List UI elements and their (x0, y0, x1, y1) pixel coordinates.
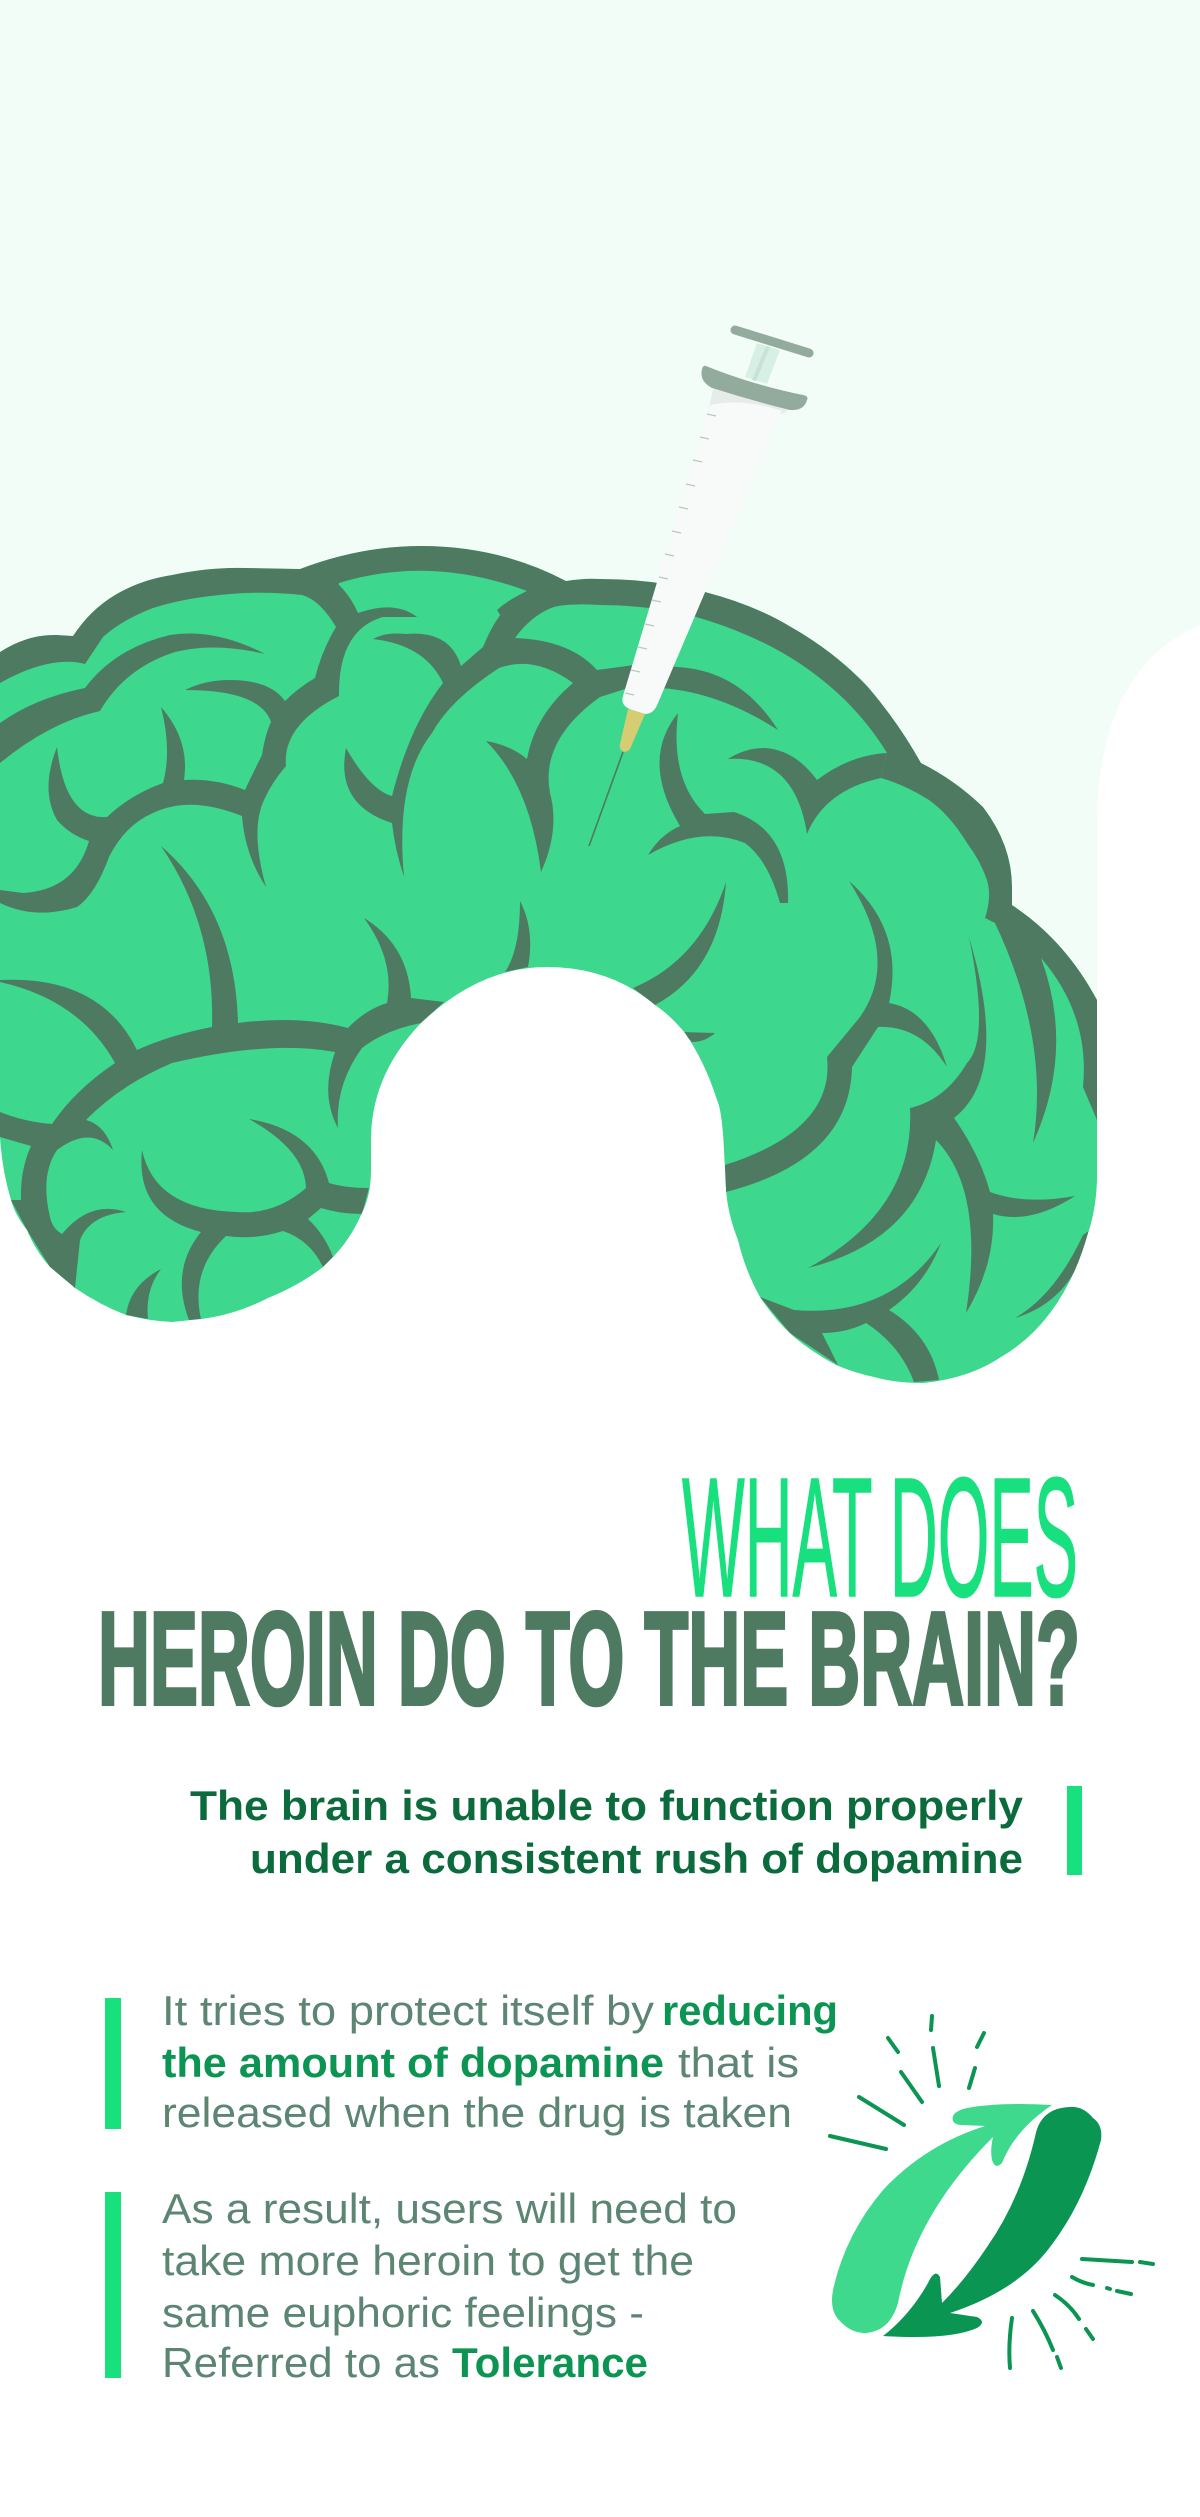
plunger rod stripe (752, 346, 770, 381)
brain body (0, 546, 1097, 1383)
statement line 1: The brain is unable to function properly (190, 1782, 1024, 1829)
statement accent bar (1067, 1786, 1082, 1875)
dark arrow (883, 2107, 1101, 2337)
accent bar (105, 1998, 121, 2129)
line 2 regular: that is (678, 2039, 799, 2086)
paragraph: tolerance (105, 2185, 737, 2386)
title (98, 1443, 1080, 1732)
outer contour band (0, 546, 1097, 1143)
tick marks (625, 414, 716, 695)
plunger rod (745, 343, 780, 384)
line 2: take more heroin to get the (162, 2237, 694, 2284)
fold: upper left arc (0, 634, 265, 763)
light arrow (832, 2104, 1052, 2333)
syringe (589, 330, 809, 846)
icon: cycle arrows (830, 2016, 1153, 2368)
paragraph: protect (105, 1987, 838, 2136)
needle hub (620, 709, 645, 752)
fold: right lobe network (725, 881, 947, 1192)
fold: right notch (728, 748, 887, 834)
line 4 bold: Tolerance (452, 2339, 648, 2386)
fold: lower left network (0, 846, 444, 1288)
fold: lower right sliver (1015, 1230, 1090, 1318)
line 1 regular: It tries to protect itself by (162, 1987, 654, 2034)
brain folds (0, 546, 1097, 1382)
flange (701, 366, 808, 410)
accent bar (105, 2192, 121, 2378)
needle (589, 752, 623, 846)
fold: lower left lobe (141, 1119, 369, 1320)
barrel (622, 403, 782, 714)
fold: centre right hook (648, 713, 788, 903)
fold: above arch right (633, 882, 726, 1005)
line 3: same euphoric feelings - (162, 2289, 644, 2336)
fold: centre network (344, 591, 778, 877)
statement line 2: under a consistent rush of dopamine (250, 1835, 1023, 1882)
burst rays (830, 2016, 1153, 2368)
fold: above arch left (505, 901, 530, 972)
fold: bottom right network (760, 1243, 941, 1382)
fold: bottom left small (126, 1269, 161, 1319)
line 4 regular: Referred to as (162, 2339, 440, 2386)
fold: upper left network (0, 583, 417, 913)
line 3: released when the drug is taken (162, 2089, 792, 2136)
brain illustration (0, 546, 1097, 1383)
plunger cap (735, 330, 809, 353)
fold: far right network (808, 937, 1075, 1313)
line 1: As a result, users will need to (162, 2185, 737, 2232)
intro statement (190, 1782, 1082, 1882)
graduation ticks (625, 414, 716, 695)
barrel neck (708, 389, 790, 414)
pale background panel (0, 0, 1200, 1020)
line 2 bold: the amount of dopamine (162, 2039, 664, 2086)
fold: small right of arch (682, 1032, 715, 1042)
line 1 bold: reducing (662, 1987, 838, 2034)
